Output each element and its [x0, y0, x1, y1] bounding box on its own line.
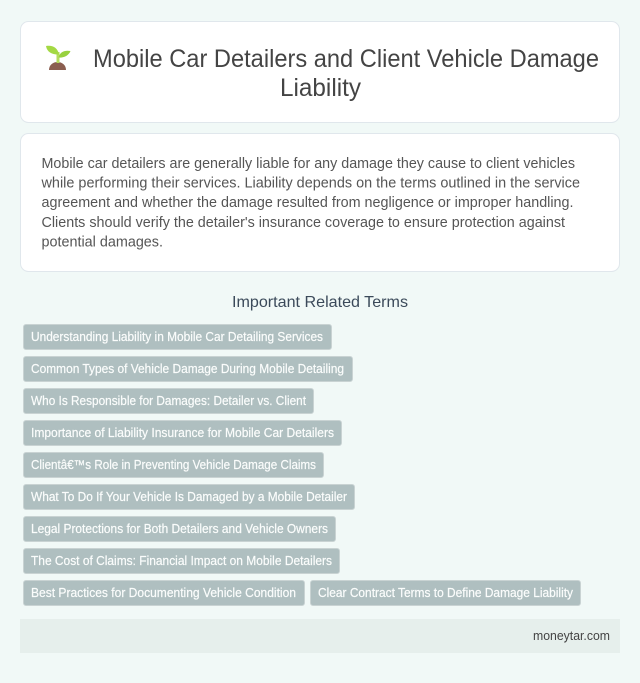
- tag: understanding liability: Understanding Liability in Mobile Car Detailing Services: [31, 330, 323, 344]
- tag: what to do: [24, 484, 354, 510]
- description text: [41, 155, 580, 250]
- tag: what to do: What To Do If Your Vehicle Is Damaged by a Mobile Detailer: [31, 490, 347, 504]
- description text: while performing their services. Liability depends on the terms outlined in the service: [41, 175, 580, 192]
- tag: legal protections: [24, 516, 336, 542]
- description text: Mobile car detailers are generally liable for any damage they cause to client vehicles: [42, 155, 575, 172]
- tag list: [24, 324, 580, 606]
- tag: who is responsible: [24, 388, 314, 414]
- heading: important related terms: Important Related Terms: [232, 294, 408, 311]
- tag: liability insurance: [24, 420, 342, 446]
- tag: clear contract terms: [310, 580, 580, 606]
- footer source text: moneytar.com: [533, 629, 610, 643]
- panel: description card: [20, 134, 620, 272]
- title text: [93, 45, 599, 102]
- tag: who is responsible: Who Is Responsible for Damages: Detailer vs. Client: [31, 394, 306, 408]
- tag: common types: Common Types of Vehicle Damage During Mobile Detailing: [31, 362, 344, 376]
- description text: Clients should verify the detailer's insurance coverage to ensure protection against: [42, 214, 566, 231]
- panel: title card: [20, 22, 620, 122]
- description text: agreement and whether the damage resulted from negligence or improper handling.: [42, 194, 574, 211]
- tag: clear contract terms: Clear Contract Terms to Define Damage Liability: [318, 586, 574, 600]
- tag: liability insurance: Importance of Liability Insurance for Mobile Car Detailers: [31, 426, 334, 440]
- tag: best practices: Best Practices for Documenting Vehicle Condition: [31, 586, 296, 600]
- footer: [20, 619, 620, 653]
- tag: best practices: [24, 580, 304, 606]
- tag: cost of claims: The Cost of Claims: Financial Impact on Mobile Detailers: [31, 554, 332, 568]
- tag: client role: [24, 452, 324, 478]
- icon: seedling: [46, 46, 70, 70]
- tag: client role: Clientâ€™s Role in Preventing Vehicle Damage Claims: [31, 458, 316, 472]
- tag: understanding liability: [24, 324, 332, 350]
- title text: Liability: [280, 74, 361, 102]
- description text: potential damages.: [42, 233, 163, 250]
- title text: Mobile Car Detailers and Client Vehicle Damage: [93, 45, 599, 73]
- tag: cost of claims: [24, 548, 340, 574]
- tag: legal protections: Legal Protections for Both Detailers and Vehicle Owners: [31, 522, 328, 536]
- tag: common types: [24, 356, 352, 382]
